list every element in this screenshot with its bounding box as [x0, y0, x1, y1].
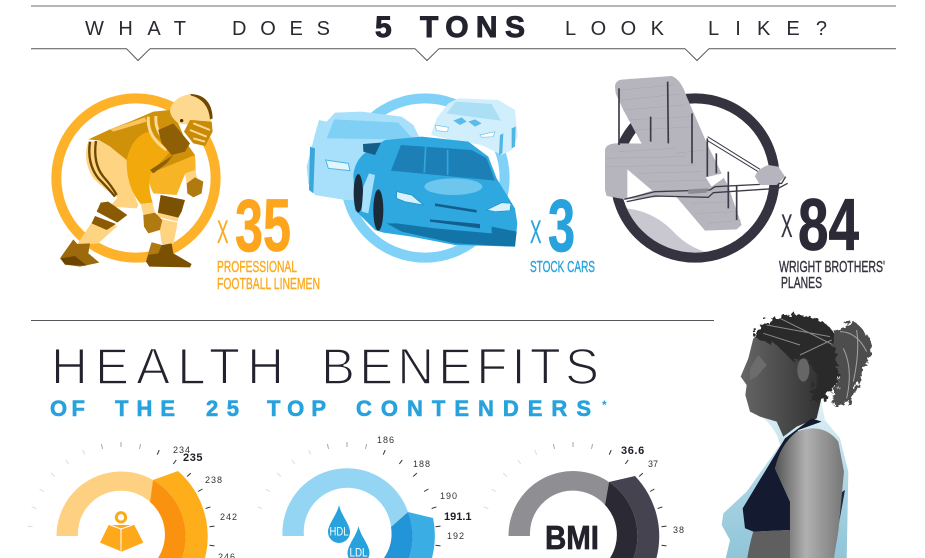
gauge arc: weight	[56, 471, 208, 558]
gauge ticks: bmi	[484, 442, 666, 546]
gauge arc: cholesterol	[282, 468, 435, 558]
gauge labels: cholesterol: 186	[377, 435, 395, 445]
panel: football linemen	[56, 94, 320, 293]
subheading: of the 25 top contenders: *	[602, 398, 607, 412]
label: wright brothers planes: PLANES	[781, 275, 822, 292]
label: wright brothers planes	[779, 259, 885, 292]
gauge labels: weight	[173, 445, 238, 558]
icon: hdl and ldl drops	[328, 505, 370, 558]
gauge: bmi	[484, 442, 685, 558]
label: x 35: 35	[235, 184, 291, 267]
gauge arc: bmi	[508, 471, 659, 558]
header: what does 5 tons look like: TONS	[420, 11, 525, 44]
subheading: of the 25 top contenders: TOP	[267, 396, 326, 421]
header: what does 5 tons look like: LIKE?	[708, 18, 827, 40]
label: x 3: X	[530, 214, 542, 250]
panel: stock cars	[307, 98, 595, 276]
header: what does 5 tons look like: WHAT	[85, 18, 186, 40]
header: what does 5 tons look like: 5	[375, 11, 392, 44]
gauge: weight	[28, 442, 238, 558]
gauge labels: cholesterol: 190	[440, 491, 458, 501]
header: what does 5 tons look like: DOES	[232, 18, 330, 40]
subheading: of the 25 top contenders: CONTENDERS	[356, 396, 591, 421]
header: what does 5 tons look like	[31, 6, 896, 60]
label: professional football linemen	[217, 259, 320, 293]
gauge labels: weight: 235	[183, 452, 203, 464]
panel: wright brothers planes	[605, 76, 885, 292]
gauge labels: weight: 234	[173, 445, 191, 455]
subheading: of the 25 top contenders: 25	[206, 396, 239, 421]
heading: health benefits: BENEFITS	[321, 338, 599, 395]
gauge labels: cholesterol: 192	[447, 531, 465, 541]
label: bmi: BMI	[545, 519, 599, 556]
header: what does 5 tons look like: LOOK	[565, 18, 665, 40]
label: x 3: 3	[548, 184, 575, 267]
gauge labels: cholesterol	[377, 435, 472, 541]
label: x 84	[781, 185, 859, 266]
gauge labels: weight: 238	[205, 475, 223, 485]
gauge labels: bmi: 36.6	[621, 445, 645, 457]
label: x 3	[530, 184, 575, 267]
gauge labels: bmi	[621, 445, 685, 535]
gauge labels: weight: 242	[220, 512, 238, 522]
label: professional football linemen: PROFESSIONAL	[217, 259, 297, 276]
gauge ticks: weight	[28, 442, 214, 546]
label: professional football linemen: FOOTBALL LINEMEN	[217, 276, 320, 293]
icon: football lineman in circle	[56, 94, 216, 267]
gauge labels: cholesterol: 191.1	[444, 511, 472, 523]
photo: woman in profile with body silhouette	[722, 314, 872, 558]
label: x 35: X	[217, 214, 228, 250]
label: x 35	[217, 184, 291, 267]
label: x 84: 84	[798, 185, 859, 266]
gauge: cholesterol	[258, 435, 472, 558]
gauge labels: bmi: 37	[648, 459, 658, 469]
gauge ticks: cholesterol	[258, 442, 440, 546]
subheading: of the 25 top contenders	[50, 396, 607, 421]
icon: hdl and ldl drops: HDL	[330, 526, 349, 538]
label: stock cars: STOCK CARS	[530, 259, 595, 276]
gauge labels: bmi: 38	[673, 525, 685, 535]
heading: health benefits: HEALTH	[51, 338, 284, 395]
icon: wright flyer in circle	[605, 76, 788, 258]
heading: health benefits	[31, 320, 714, 395]
subheading: of the 25 top contenders: OF	[50, 396, 85, 421]
label: x 84: X	[781, 208, 792, 244]
gauge labels: cholesterol: 188	[413, 459, 431, 469]
subheading: of the 25 top contenders: THE	[115, 396, 175, 421]
icon: weight	[100, 513, 143, 552]
icon: three stock cars in circle	[307, 98, 518, 258]
